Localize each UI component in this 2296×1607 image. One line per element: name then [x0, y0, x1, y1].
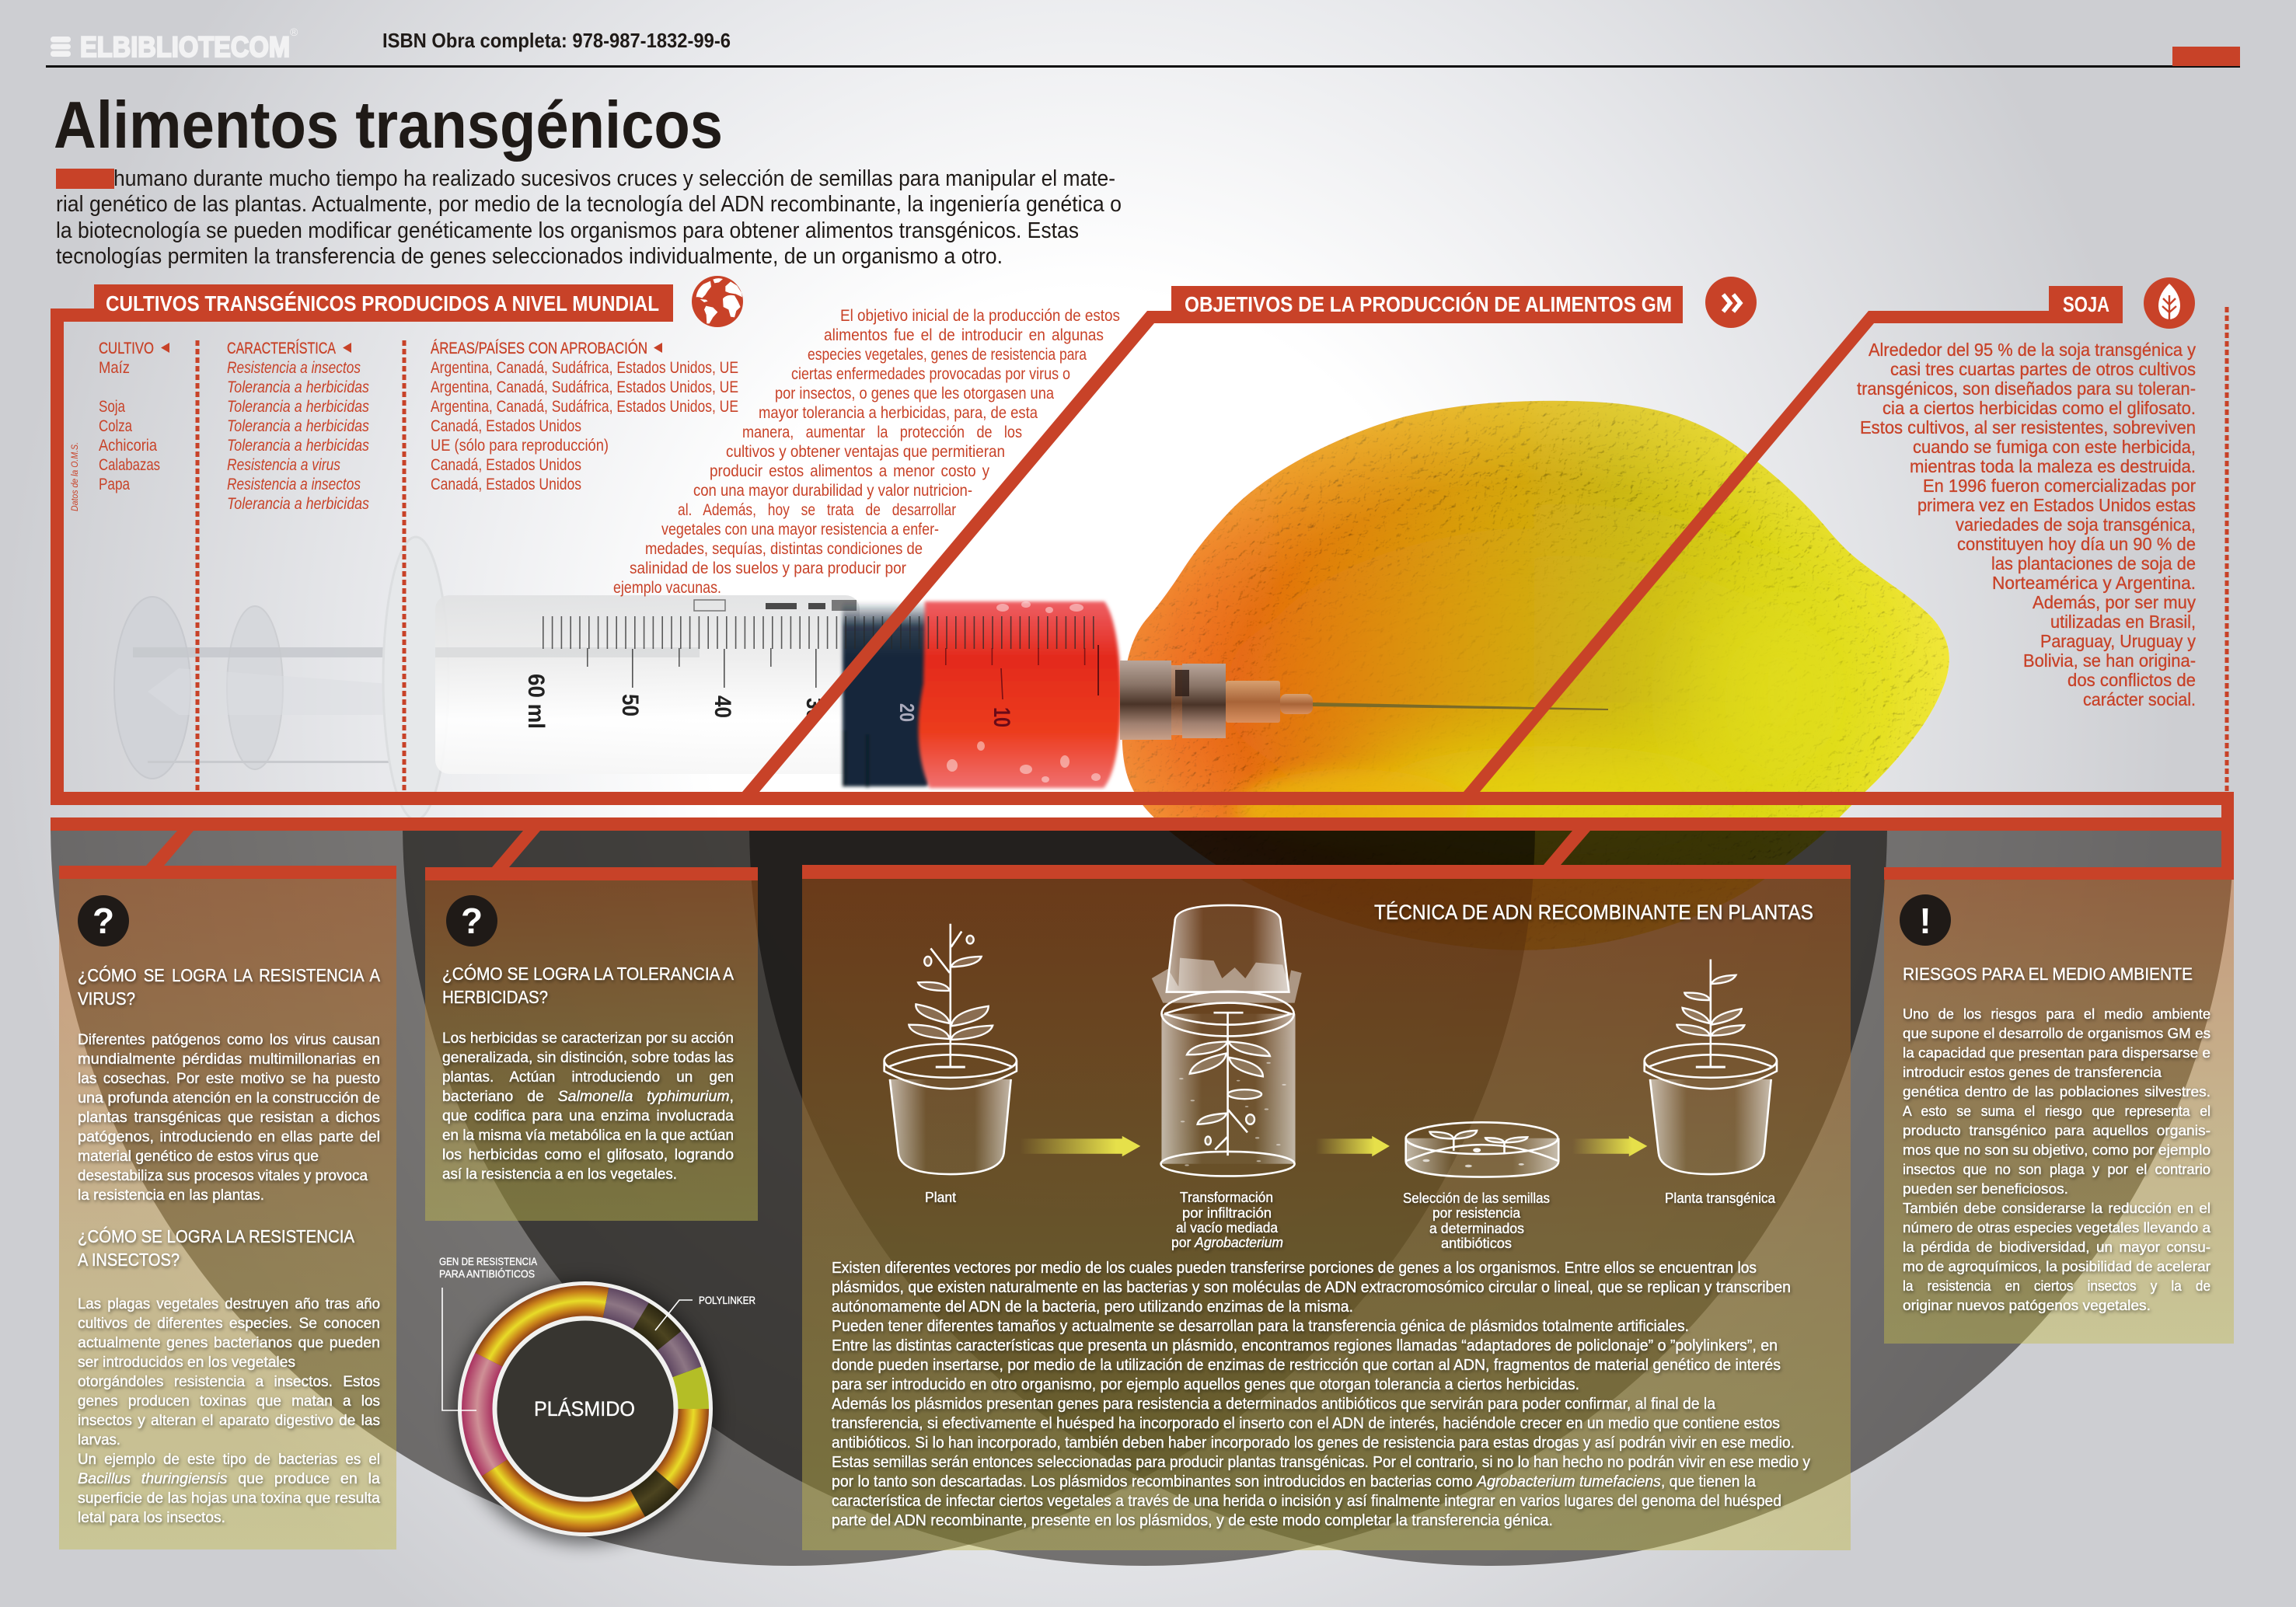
panel: resistencia a virus e insectos: [59, 866, 396, 1549]
step labels: por infiltración: [1182, 1205, 1272, 1221]
panel text: cultivos de diferentes especies. Se conocen: [78, 1316, 380, 1332]
table column: característica: Tolerancia a herbicidas: [227, 398, 369, 416]
table column: característica: CARACTERÍSTICA: [227, 340, 336, 357]
table column: característica: Resistencia a insectos: [227, 359, 361, 377]
barrel print marks: [694, 600, 857, 611]
soja text: Estos cultivos, al ser resistentes, sobreviven: [1860, 417, 2196, 437]
table column: áreas / países: Argentina, Canadá, Sudáfrica, Estados Unidos, UE: [431, 359, 738, 377]
table column: cultivo: [99, 340, 169, 493]
objetivos text: medades, sequías, distintas condiciones de: [645, 540, 923, 558]
barrel rod shadow: [435, 647, 700, 657]
table column: áreas / países: UE (sólo para reproducción): [431, 437, 609, 455]
ISBN: ISBN Obra completa: 978-987-1832-99-6: [382, 29, 731, 52]
ring segments: [477, 1301, 693, 1517]
arrow: plant to tube: [1020, 1136, 1140, 1156]
panel text: También debe considerarse la reducción en el: [1903, 1201, 2211, 1216]
table column: cultivo: Achicoria: [99, 437, 157, 455]
intro paragraph: la biotecnología se pueden modificar genéticamente los organismos para obtener alimentos transgénicos. Estas: [56, 218, 1079, 243]
panel text: mos que no son su objetivo, como por ejemplo: [1903, 1142, 2211, 1158]
panel text: la capacidad que presentan para dispersarse e: [1903, 1045, 2211, 1061]
panel paragraph: Entre las distintas características que presenta un plásmido, encontramos regiones llamadas “adaptadores de policlonaje” o ”polylinkers”, en: [832, 1337, 1778, 1354]
arrow: tube to dish: [1316, 1136, 1390, 1156]
table column: característica: [227, 340, 369, 513]
panel text: la resistencia en las plantas.: [78, 1187, 264, 1204]
table column: cultivo: Colza: [99, 417, 132, 435]
objetivos text: por insectos, o genes que les otorgasen una: [775, 385, 1054, 403]
objetivos text: ejemplo vacunas.: [613, 579, 721, 597]
step labels: al vacío mediada: [1176, 1220, 1279, 1236]
panel text: la resistencia en ciertos insectos y la de: [1903, 1278, 2211, 1294]
scale numbers: 40: [710, 695, 735, 718]
plasmid label: PLÁSMIDO: [534, 1397, 635, 1421]
panel text: genes producen toxinas que matan a los: [78, 1393, 380, 1410]
panel text: mo de agroquímicos, la posibilidad de acelerar: [1903, 1259, 2211, 1274]
syringe photograph: [114, 537, 1608, 820]
intro paragraph: rial genético de las plantas. Actualmente, por medio de la tecnología del ADN recombinante, la ingeniería genética o: [56, 192, 1122, 217]
objetivos text: mayor tolerancia a herbicidas, para, de esta: [759, 404, 1038, 422]
panel text: en la misma vía metabólica en la que actúan: [442, 1128, 734, 1144]
soja text: primera vez en Estados Unidos estas: [1917, 495, 2196, 515]
soja frame diagonal: [1464, 311, 2052, 792]
needle: [1313, 702, 1608, 710]
panel paragraph: donde pueden insertarse, por medio de la utilización de enzimas de restricción que cortan al ADN, fragmentos de material genético de interés: [832, 1356, 1781, 1374]
section header: soja: SOJA: [2063, 292, 2109, 316]
panel: técnica de ADN recombinante: [802, 865, 1851, 1550]
panel text: VIRUS?: [78, 988, 135, 1009]
table column: áreas / países: Canadá, Estados Unidos: [431, 476, 581, 493]
panel paragraph: autónomamente del ADN de la bacteria, pero utilizando enzimas de la misma.: [832, 1298, 1353, 1316]
table column: característica: Tolerancia a herbicidas: [227, 378, 369, 396]
section header: cultivos: [94, 284, 673, 322]
icon: question: ?: [92, 901, 114, 941]
graduation ticks: [543, 633, 1098, 699]
plasmid diagram: [439, 1255, 755, 1543]
barrel finger flange: [383, 537, 448, 820]
soja text: las plantaciones de soja de: [1991, 553, 2196, 573]
step labels: Planta transgénica: [1665, 1190, 1776, 1206]
barrel: [435, 595, 860, 774]
step labels: antibióticos: [1441, 1236, 1512, 1251]
panel text: originar nuevos patógenos vegetales.: [1903, 1298, 2151, 1313]
soja text: Además, por ser muy: [2033, 592, 2196, 612]
objetivos text: manera, aumentar la protección de los: [742, 424, 1022, 441]
soja text: dos conflictos de: [2067, 670, 2196, 690]
section header: cultivos: CULTIVOS TRANSGÉNICOS PRODUCIDOS A NIVEL MUNDIAL: [106, 291, 659, 315]
panel text: introducir estos genes de transferencia: [1903, 1065, 2162, 1080]
logo: ELBIBLIOTECOM: [80, 31, 290, 63]
soja text: [1857, 340, 2196, 709]
table column: característica: Resistencia a insectos: [227, 476, 361, 493]
icon: exclamation: !: [1919, 901, 1931, 941]
table column: característica: Tolerancia a herbicidas: [227, 417, 369, 435]
soja text: utilizadas en Brasil,: [2050, 612, 2196, 632]
panel paragraph: Pueden tener diferentes tamaños y actualmente se desarrollan para la transferencia génica de plásmidos totalmente artificiales.: [832, 1317, 1689, 1335]
lemon photograph: [1122, 401, 1949, 950]
source note: Datos de la O.M.S.: [69, 442, 80, 511]
objetivos text: alimentos fue el de introducir en algunas: [824, 326, 1104, 344]
intro paragraph: [56, 166, 1122, 269]
panel paragraph: antibióticos. Si lo han incorporado, también deben haber incorporado los genes de resistencia para estas drogas y así podrán vivir en ese medio.: [832, 1434, 1795, 1452]
panel paragraph: parte del ADN recombinante, presente en los plásmidos, y de este modo completar la transferencia génica.: [832, 1511, 1553, 1529]
panel text: los herbicidas como el glifosato, logrando: [442, 1147, 734, 1163]
table column: característica: Resistencia a virus: [227, 456, 340, 474]
polylinker callout: [655, 1294, 755, 1330]
soja text: transgénicos, son diseñados para su toleran-: [1857, 378, 2196, 399]
scale numbers: 10: [989, 707, 1014, 727]
panel paragraph: característica de infectar ciertos vegetales a través de una herida o incisión y así finalmente integrar en varios lugares del genoma del huésped: [832, 1492, 1781, 1510]
panel text: plantas transgénicas que resistan a dichos: [78, 1110, 380, 1126]
header rule: [46, 65, 2240, 68]
table column: áreas / países: Canadá, Estados Unidos: [431, 456, 581, 474]
table column: cultivo: CULTIVO: [99, 340, 154, 357]
scale numbers: 50: [617, 694, 643, 716]
ring outlines: [460, 1284, 710, 1534]
soja text: variedades de soja transgénica,: [1956, 514, 2196, 535]
section header: objetivos: OBJETIVOS DE LA PRODUCCIÓN DE ALIMENTOS GM: [1185, 292, 1672, 316]
frame: left section outline and double bars: [51, 309, 2234, 870]
panel text: larvas.: [78, 1432, 120, 1448]
objetivos text: producir estos alimentos a menor costo y: [710, 462, 989, 480]
process illustrations: [885, 905, 1777, 1177]
panel text: que supone el desarrollo de organismos GM es: [1903, 1026, 2211, 1041]
objetivos frame diagonal: [742, 311, 1174, 792]
panel text: ¿CÓMO SE LOGRA LA RESISTENCIA A: [78, 965, 381, 985]
red liquid: [919, 601, 1122, 788]
table column: cultivo: Papa: [99, 476, 130, 493]
panel paragraph: plásmidos, que existen naturalmente en las bacterias y son moléculas de ADN extracromosómico circular o lineal, que se replican y transcriben: [832, 1278, 1791, 1296]
antibiotic gene callout: [439, 1255, 538, 1410]
table column: áreas / países: Argentina, Canadá, Sudáfrica, Estados Unidos, UE: [431, 398, 738, 416]
soja text: Norteamérica y Argentina.: [1992, 573, 2196, 593]
table column: cultivo: Maíz: [99, 359, 130, 377]
panel text: número de otras especies vegetales llevando a: [1903, 1220, 2211, 1236]
scale numbers: 30: [801, 698, 827, 720]
icon: plant in pot: [885, 924, 1017, 1174]
soja text: cia a ciertos herbicidas como el glifosato.: [1883, 398, 2196, 418]
panel text: bacteriano de Salmonella typhimurium ,: [442, 1089, 734, 1105]
soja text: Bolivia, se han origina-: [2023, 650, 2196, 671]
scale numbers: 60 ml: [523, 674, 549, 729]
soja text: constituyen hoy día un 90 % de: [1957, 534, 2196, 554]
panel text: la pérdida de biodiversidad, un mayor consu-: [1903, 1239, 2211, 1255]
objetivos text: [613, 307, 1120, 597]
rubber plunger seal: [843, 601, 930, 787]
table column: cultivo: Soja: [99, 398, 125, 416]
panel text: plantas. Actúan introduciendo un gen: [442, 1069, 734, 1086]
panel paragraph: Estas semillas serán entonces seleccionadas para producir plantas transgénicas. Por el contrario, si no lo han hecho no podrán vivir en ese medio y: [832, 1453, 1811, 1471]
panel paragraph: por lo tanto son descartadas. Los plásmidos recombinantes son introducidos en bacterias como Agrobacterium tumefaciens, que tienen la: [832, 1473, 1757, 1490]
plunger flange near: [227, 606, 283, 769]
panel text: Los herbicidas se caracterizan por su acción: [442, 1030, 734, 1047]
panel text: Uno de los riesgos para el medio ambiente: [1903, 1006, 2211, 1022]
icon: double chevron: [1705, 277, 1757, 328]
objetivos text: con una mayor durabilidad y valor nutricion-: [693, 482, 972, 500]
panel text: Diferentes patógenos como los virus causan: [78, 1032, 380, 1048]
soja text: En 1996 fueron comercializadas por: [1923, 476, 2196, 496]
panel title: TÉCNICA DE ADN RECOMBINANTE EN PLANTAS: [1374, 901, 1813, 924]
panel text: una profunda atención en la construcción de: [78, 1090, 380, 1107]
panel text: [1903, 964, 2211, 1313]
panel paragraph: Existen diferentes vectores por medio de los cuales pueden transferirse porciones de genes a los organismos. Entre ellos se encuentran los: [832, 1259, 1757, 1277]
soja text: mientras toda la maleza es destruida.: [1910, 456, 2196, 476]
dark overlapping circles: [51, 831, 2232, 1566]
panel paragraph: para ser introducido en otro organismo, por ejemplo aquellos genes que otorgan tolerancia a ciertos herbicidas.: [832, 1375, 1579, 1393]
step labels: [925, 1190, 1776, 1251]
icon: leaf: [2144, 277, 2195, 329]
panel text: genética dentro de las poblaciones silvestres.: [1903, 1084, 2211, 1100]
panel text: [78, 965, 381, 1526]
panel text: ¿CÓMO SE LOGRA LA RESISTENCIA: [78, 1226, 355, 1246]
objetivos text: al. Además, hoy se trata de desarrollar: [678, 501, 956, 519]
panel text: desestabiliza sus procesos vitales y provoca: [78, 1168, 368, 1184]
logo: ®: [290, 26, 298, 38]
objetivos text: ciertas enfermedades provocadas por virus o: [791, 365, 1070, 383]
panel text: A esto se suma el riesgo que representa el: [1903, 1103, 2211, 1119]
soja text: casi tres cuartas partes de otros cultivos: [1890, 359, 2196, 379]
panel text: otorgándoles resistencia a insectos. Estos: [78, 1374, 380, 1390]
panel paragraph: Además los plásmidos presentan genes para resistencia a determinados antibióticos que servirán para poder confirmar, al final de la: [832, 1395, 1716, 1413]
antibiotic gene callout: GEN DE RESISTENCIA: [439, 1255, 538, 1267]
antibiotic gene callout: PARA ANTIBIÓTICOS: [439, 1267, 535, 1280]
plunger flange far: [114, 597, 190, 779]
soja text: cuando se fumiga con este herbicida,: [1913, 437, 2196, 457]
panel text: patógenos, introduciendo en ellas parte del: [78, 1129, 380, 1145]
table column: cultivo: Calabazas: [99, 456, 160, 474]
panel: riesgos para el medio ambiente: [1884, 867, 2234, 1344]
table column: áreas / países: Canadá, Estados Unidos: [431, 417, 581, 435]
panel text: Un ejemplo de este tipo de bacterias es el: [78, 1452, 380, 1468]
section header: objetivos: [1171, 286, 1683, 323]
panel text: Las plagas vegetales destruyen año tras año: [78, 1296, 380, 1312]
panel text: A INSECTOS?: [78, 1250, 180, 1270]
soja text: Paraguay, Uruguay y: [2040, 631, 2196, 651]
panel text: letal para los insectos.: [78, 1510, 225, 1526]
panel text: HERBICIDAS?: [442, 987, 548, 1007]
icon: exclamation: [1900, 894, 1951, 946]
panel text: insectos que no son plaga y por el contrario: [1903, 1162, 2211, 1177]
title: Alimentos transgénicos: [54, 89, 723, 162]
objetivos text: salinidad de los suelos y para producir por: [630, 559, 906, 577]
icon: globe: [692, 276, 743, 327]
panel text: mundialmente pérdidas multimillonarias en: [78, 1051, 380, 1068]
metal needle hub: [1120, 661, 1313, 740]
panel: tolerancia a herbicidas: [425, 867, 758, 1221]
panel text: generalizada, sin distinción, sobre todas las: [442, 1050, 734, 1066]
icon: infiltration tube: [1152, 905, 1302, 1176]
table column: característica: Tolerancia a herbicidas: [227, 437, 369, 455]
objetivos text: especies vegetales, genes de resistencia para: [808, 346, 1087, 364]
panel text: material genético de estos virus que: [78, 1149, 319, 1165]
panel text: Bacillus thuringiensis que produce en la: [78, 1471, 380, 1487]
icon: transgenic plant: [1645, 959, 1777, 1174]
plasmid inner disc: [495, 1319, 675, 1499]
panel text: ¿CÓMO SE LOGRA LA TOLERANCIA A: [442, 964, 735, 984]
panel text: RIESGOS PARA EL MEDIO AMBIENTE: [1903, 964, 2193, 984]
panel text: que codifica para una enzima involucrada: [442, 1108, 734, 1124]
column dividers: [197, 307, 2227, 792]
plunger rod: [133, 647, 397, 763]
soja text: Alrededor del 95 % de la soja transgénica y: [1869, 340, 2196, 360]
panel text: ser introducidos en los vegetales: [78, 1354, 295, 1371]
panel paragraph: [832, 1259, 1811, 1529]
icon: question: [78, 895, 129, 946]
objetivos text: cultivos y obtener ventajas que permitieran: [726, 443, 1005, 461]
intro paragraph: humano durante mucho tiempo ha realizado sucesivos cruces y selección de semillas para manipular el mate-: [113, 166, 1115, 191]
table column: áreas / países: Argentina, Canadá, Sudáfrica, Estados Unidos, UE: [431, 378, 738, 396]
corner tab: [2172, 47, 2240, 66]
icon: question: ?: [461, 901, 483, 941]
objetivos text: El objetivo inicial de la producción de estos: [840, 307, 1120, 325]
polylinker callout: POLYLINKER: [699, 1294, 755, 1306]
arrow: dish to plant: [1572, 1136, 1647, 1156]
step labels: Selección de las semillas: [1403, 1190, 1550, 1206]
step labels: por Agrobacterium: [1171, 1235, 1283, 1250]
panel text: así la resistencia a en los vegetales.: [442, 1166, 677, 1183]
panel text: las cosechas. Por este motivo se ha puesto: [78, 1071, 380, 1087]
intro paragraph: tecnologías permiten la transferencia de genes seleccionados individualmente, de un organismo a otro.: [56, 244, 1003, 269]
panel paragraph: transferencia, si efectivamente el huésped ha incorporado el inserto con el ADN de interés, haciéndole crecer en un medio que contiene estos: [832, 1414, 1780, 1432]
step labels: a determinados: [1429, 1221, 1524, 1236]
icon: question: [446, 895, 497, 946]
step labels: Plant: [925, 1190, 956, 1205]
ring shadow: [455, 1282, 716, 1543]
table column: característica: Tolerancia a herbicidas: [227, 495, 369, 513]
panel text: superficie de las hojas una toxina que resulta: [78, 1490, 380, 1507]
icon: petri dish: [1406, 1122, 1558, 1177]
table column: áreas / países: [431, 340, 738, 493]
step labels: Transformación: [1180, 1190, 1273, 1205]
panel text: producto transgénico para aquellos organis-: [1903, 1123, 2211, 1138]
panel text: [442, 964, 735, 1183]
panel text: insectos y alteran el aparato digestivo de las: [78, 1413, 380, 1429]
panel text: actualmente genes bacterianos que pueden: [78, 1335, 380, 1351]
section header: soja: [2049, 286, 2123, 323]
panel text: pueden ser beneficiosos.: [1903, 1181, 2068, 1197]
connector diagonals to panels: [146, 831, 1590, 867]
soja text: carácter social.: [2083, 689, 2196, 709]
step labels: por resistencia: [1432, 1205, 1521, 1221]
table column: áreas / países: ÁREAS/PAÍSES CON APROBACIÓN: [431, 340, 647, 357]
objetivos text: vegetales con una mayor resistencia a enfer-: [661, 521, 939, 539]
scale numbers: 20: [895, 703, 919, 722]
scale numbers: [523, 674, 1014, 729]
